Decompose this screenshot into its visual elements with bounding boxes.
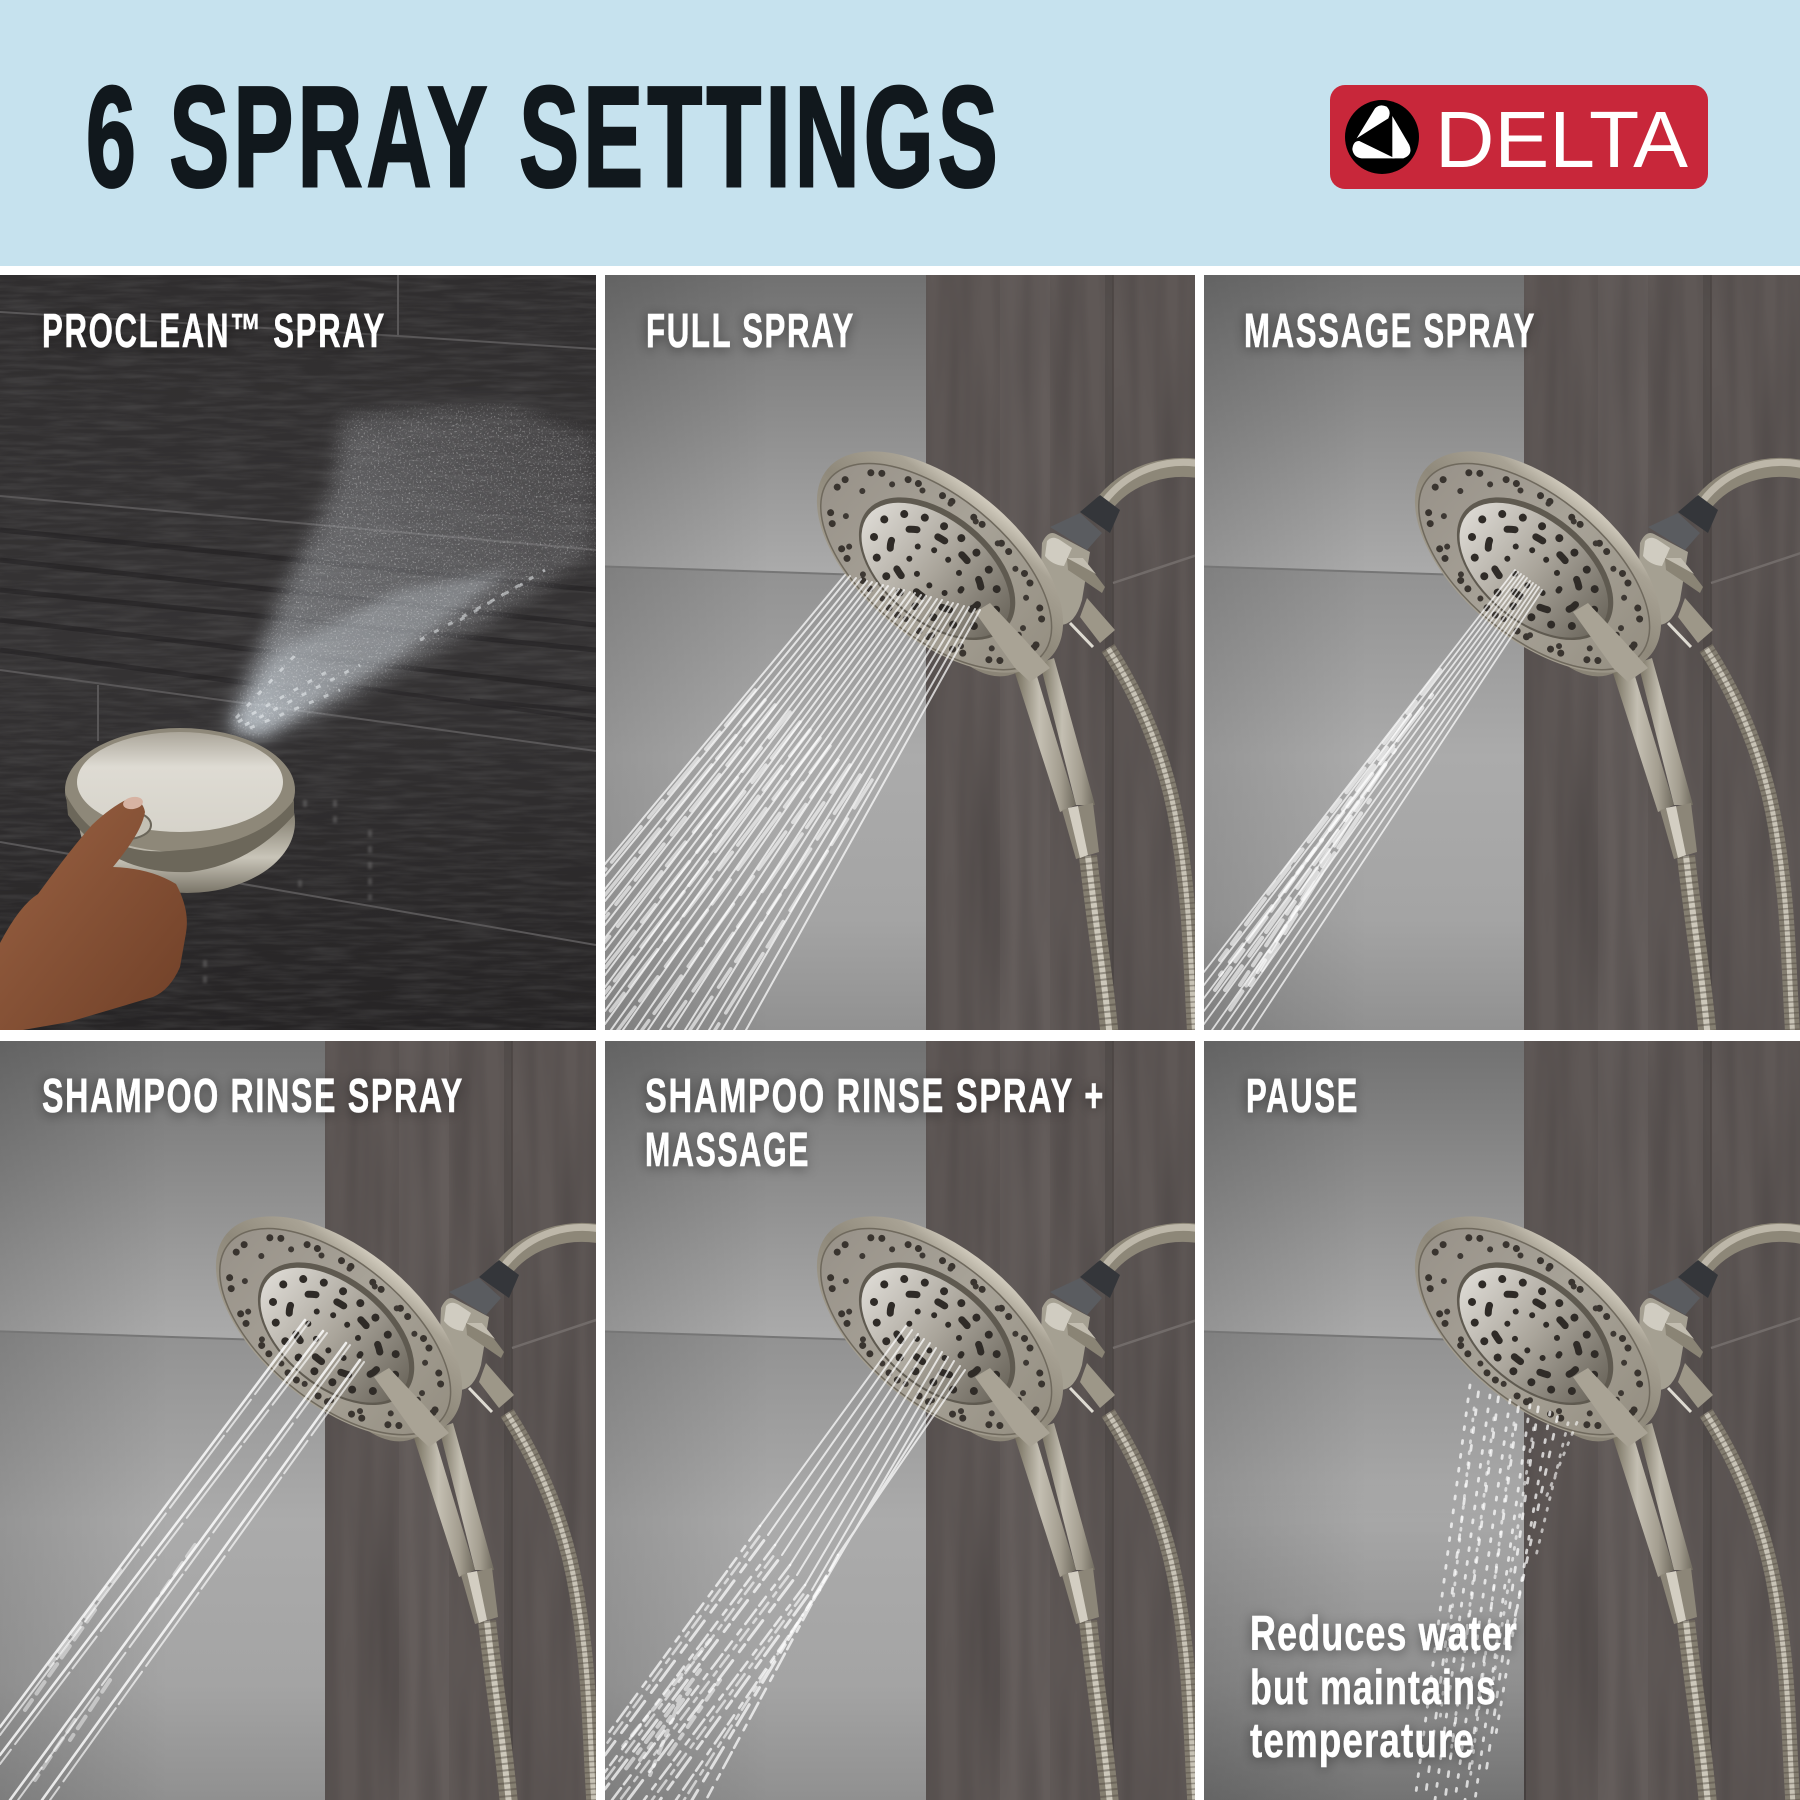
water jets (0, 1320, 364, 1800)
water streaks (1204, 570, 1542, 1030)
shower scene (590, 270, 1218, 1040)
water streaks (605, 575, 980, 1030)
label: SHAMPOO RINSE SPRAY + (645, 1070, 1105, 1123)
panel: full spray (590, 270, 1218, 1040)
panel: massage spray (1188, 270, 1800, 1040)
title: 6 SPRAY SETTINGS (86, 58, 1002, 217)
label: SHAMPOO RINSE SPRAY (42, 1070, 464, 1123)
panel: ProClean spray (0, 275, 596, 1034)
panel: pause (1188, 1035, 1800, 1800)
dark gradient behind note (1204, 1480, 1526, 1800)
shower scene (1188, 270, 1800, 1040)
label: PROCLEAN™ SPRAY (42, 305, 386, 358)
label: PAUSE (1246, 1070, 1359, 1123)
logo: Delta (1330, 85, 1708, 189)
label (645, 1070, 1105, 1177)
panel: shampoo rinse spray (0, 1035, 617, 1800)
note: reduces water but maintains temperature (1250, 1607, 1518, 1768)
label: MASSAGE (645, 1124, 810, 1177)
falling water drops (1415, 1380, 1580, 1800)
label: FULL SPRAY (646, 305, 855, 358)
panel: shampoo rinse spray plus massage (590, 1035, 1218, 1800)
shower scene (0, 1035, 617, 1800)
label: MASSAGE SPRAY (1244, 305, 1536, 358)
header band (0, 0, 1800, 266)
icon: Delta triangle mark (1345, 100, 1419, 174)
water mist cone (228, 403, 596, 739)
icon: hand (0, 795, 187, 1034)
note: reduces water but maintains temperature: Reduces water (1250, 1607, 1518, 1661)
shower scene (1188, 1035, 1800, 1800)
shower scene (590, 1035, 1218, 1800)
note: reduces water but maintains temperature: but maintains (1250, 1661, 1497, 1715)
water streaks (605, 1326, 965, 1800)
note: reduces water but maintains temperature: temperature (1250, 1714, 1475, 1768)
brand name: DELTA (1435, 95, 1689, 184)
icon: hand shower (65, 728, 295, 893)
